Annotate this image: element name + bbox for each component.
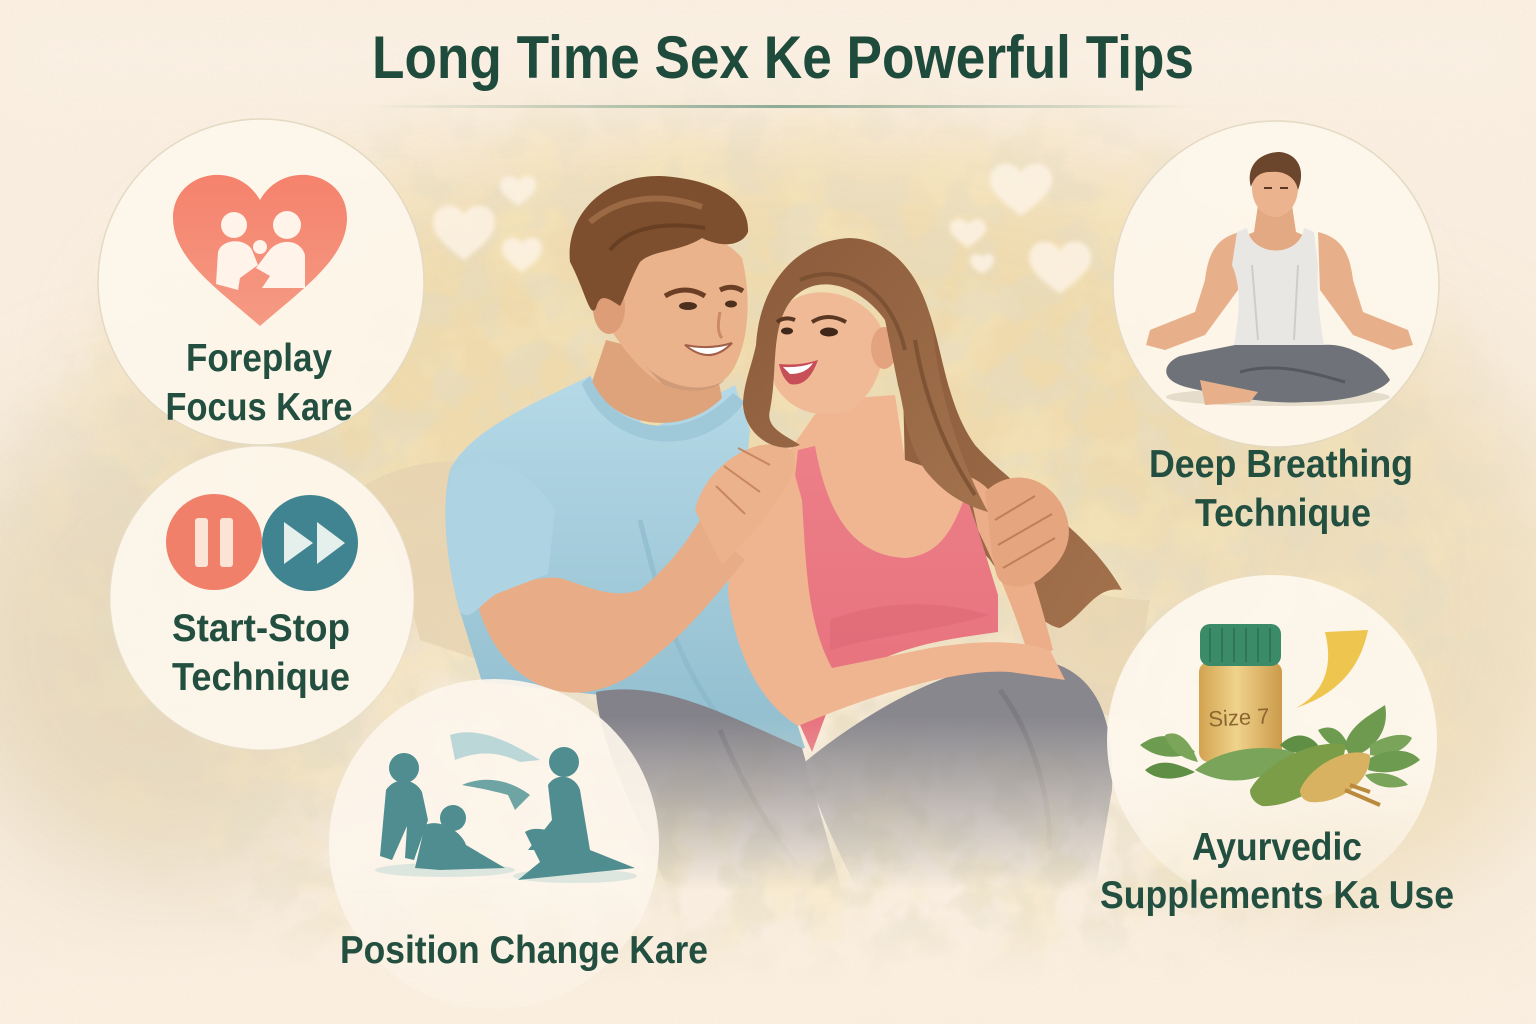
panel: start-stop [110,446,414,750]
man legs [596,689,838,880]
man hair [570,176,748,311]
woman head [772,292,883,414]
sleeve [446,462,555,615]
panel: position change [329,679,708,1009]
icon: supplement jar [1199,624,1282,762]
woman neck and chest [790,395,963,558]
man collar [582,376,745,442]
woman hair back [900,262,1122,628]
panel: deep breathing [1113,121,1439,535]
sofa [365,461,480,660]
label: Technique [172,656,350,699]
label [166,337,352,429]
man forearm [478,520,745,693]
icon: yellow swoosh [1296,630,1368,708]
man neck [592,340,722,423]
label [1100,826,1454,917]
label: Deep Breathing [1149,443,1413,486]
label: Focus Kare [166,386,352,429]
illustration: couple [365,176,1150,920]
woman hair front [743,238,988,512]
woman near arm and forearm [728,450,1065,726]
panel: foreplay [98,119,424,445]
man torso [445,376,805,765]
label: Foreplay [186,337,332,380]
decorative hearts [433,164,1091,294]
label [172,607,350,699]
woman pink top [790,446,998,752]
panel: ayurvedic supplements [1100,575,1454,917]
label: Ayurvedic [1192,826,1362,869]
man hand on shoulder [985,478,1069,587]
label: Position Change Kare [340,929,708,972]
man head [606,230,748,390]
icon: supplement jar: Size 7 [1208,703,1270,732]
label: Supplements Ka Use [1100,874,1454,917]
label: Technique [1195,492,1371,535]
icon: heart with figures [173,175,347,326]
icon: herbs and pods [1140,705,1420,806]
title: Long Time Sex Ke Powerful Tips [372,24,1194,91]
icon: fast forward [262,495,358,591]
man hand [695,444,794,565]
label: Start-Stop [172,607,350,650]
man face [665,287,743,355]
man ear [593,282,625,334]
icon: figures and arrows [375,732,637,883]
woman legs [806,664,1112,879]
label [1149,443,1413,535]
woman face [777,317,846,384]
woman far shoulder and arm [971,478,1053,651]
icon: pause [166,494,262,590]
icon: meditating man [1146,152,1413,406]
